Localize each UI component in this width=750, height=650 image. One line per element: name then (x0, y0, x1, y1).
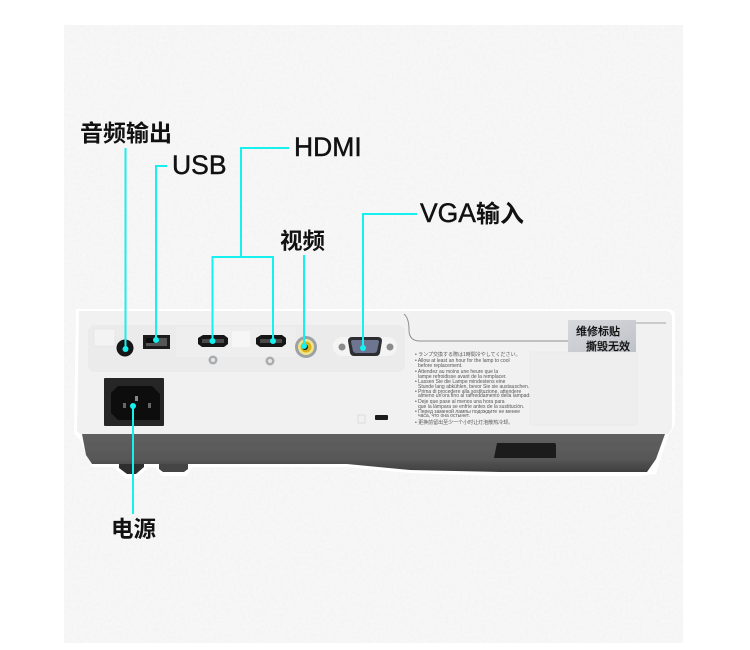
label: HDMI: HDMI (294, 132, 362, 162)
label: VGA input: VGA输入 (420, 198, 524, 228)
faint right label (530, 352, 637, 425)
callout line: USB (153, 166, 167, 343)
power inlet (104, 378, 164, 426)
upper white housing (77, 311, 672, 434)
Kensington lock (358, 415, 388, 423)
USB port (143, 335, 170, 349)
warning label text: almeno un'ora fino al raffreddamento della lampada. (418, 393, 533, 399)
vent slot (494, 443, 556, 458)
right seam (636, 322, 666, 324)
rubber feet (119, 462, 188, 474)
repair sticker (568, 320, 636, 353)
lower dark housing (82, 434, 665, 472)
callout line: video (301, 255, 307, 349)
callout line: VGA (360, 214, 417, 351)
callout line: audio out (122, 148, 128, 352)
HDMI port left (198, 335, 228, 364)
VGA port (333, 337, 397, 356)
repair sticker: 维修标贴 (576, 324, 620, 338)
port recess (88, 325, 405, 372)
rear lid seam (404, 314, 568, 341)
warning label text: • Перед заменой лампы подождите не менее (415, 408, 520, 415)
repair sticker: 撕毁无效 (586, 339, 630, 353)
label: audio out: 音频输出 (80, 120, 172, 146)
warning label text: Stunde lang abkühlen, bevor Sie sie austauschen. (418, 384, 529, 390)
label: power: 电源 (111, 517, 157, 542)
projector rear view (74, 309, 675, 479)
label: video: 视频 (280, 229, 325, 254)
warning label text: • Prima di procedere alla sostituzione, attendere (415, 389, 521, 395)
label: USB: USB (172, 150, 226, 180)
audio jack (116, 340, 134, 356)
panel: paper background (64, 25, 683, 643)
warning label text: • 更换前留出至少一个小时让灯泡散热冷却。 (415, 419, 513, 426)
warning label text: before replacement. (418, 363, 462, 369)
warning label text: lampe refroidisse avant de la remplacer. (418, 374, 507, 380)
callout line: HDMI (210, 148, 289, 344)
RCA video port (295, 336, 317, 358)
warning label text: • Allow at least an hour for the lamp to cool (415, 358, 510, 364)
warning label text: que la lámpara se enfríe antes de la sustitución. (418, 404, 524, 410)
HDMI port right (256, 335, 286, 366)
warning label text: • ランプ交換する際は1時間冷やしてください。 (415, 351, 520, 358)
warning label text: • Deje que pase al menos una hora para (415, 399, 505, 405)
callout line: power (130, 403, 136, 514)
small blank sticker (94, 329, 115, 346)
warning label text: часа, что она остынет. (418, 413, 470, 419)
blank square (232, 331, 250, 347)
white sticker outline (74, 309, 675, 479)
warning label text: • Attendez au moins une heure que la (415, 369, 498, 375)
warning label text (415, 351, 533, 426)
HDMI blank plate (176, 327, 296, 357)
warning label text: • Lassen Sie die Lampe mindestens eine (415, 379, 506, 385)
